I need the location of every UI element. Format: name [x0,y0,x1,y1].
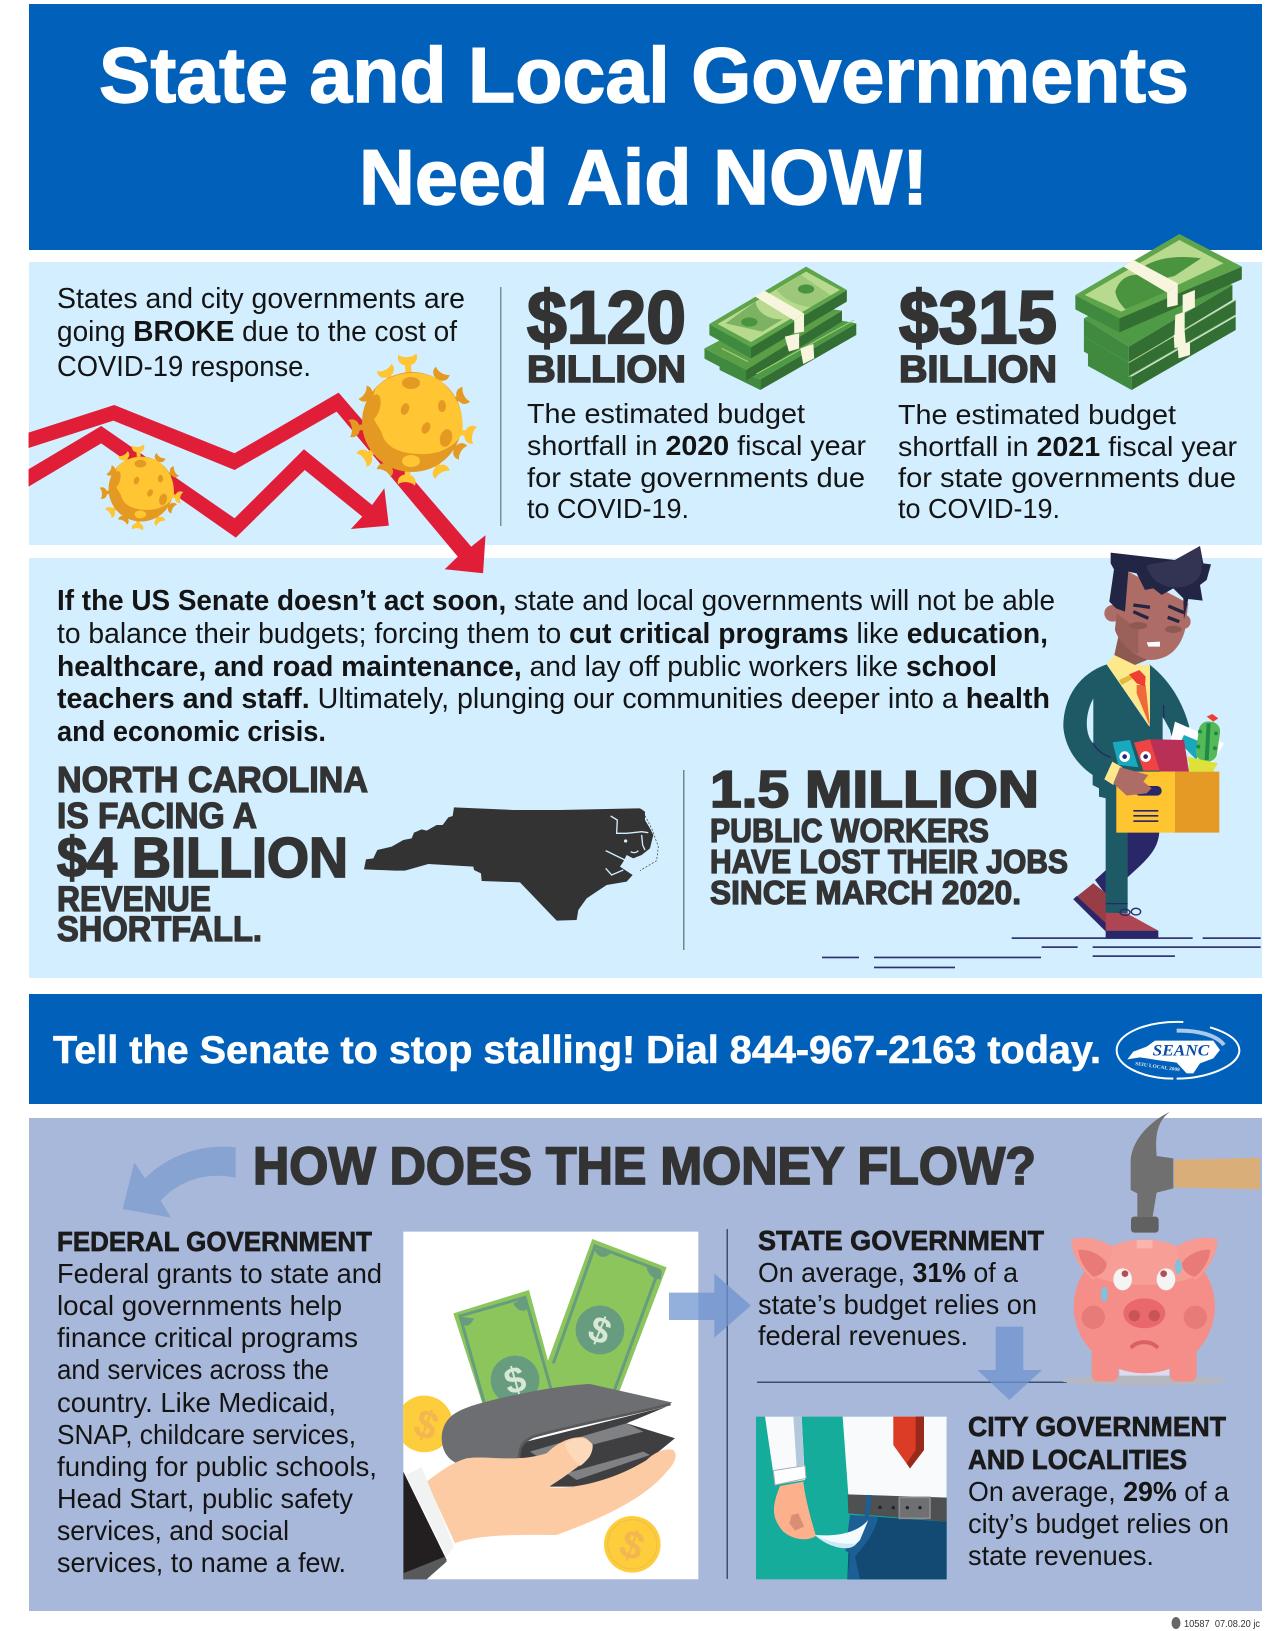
call to action banner [29,994,1262,1104]
arrow: to state [669,1273,751,1338]
senate paragraph: healthcare, and road maintenance, and lay off public workers like school [57,651,997,683]
$315 billion stat: shortfall in 2021 fiscal year [898,431,1237,462]
state government text: STATE GOVERNMENT [758,1225,1044,1256]
north carolina stat: NORTH CAROLINA [57,759,368,800]
icon: small virus [100,444,183,530]
$120 billion stat [527,276,866,524]
illustration: worker carrying box [822,546,1261,968]
illustration: wallet in hand: $ [583,1307,617,1353]
coin [604,1516,661,1573]
shirt and tie [1107,655,1150,727]
jacket [1063,664,1189,798]
illustration: wallet in hand [403,1232,698,1579]
illustration: wallet in hand: $ [500,1358,530,1403]
title banner [29,4,1262,250]
title: State and Local Governments [99,31,1189,119]
illustration: hammer over piggy bank [1061,1112,1260,1386]
senate paragraph: teachers and staff. Ultimately, plunging our communities deeper into a health [57,683,1050,715]
heading: HOW DOES THE MONEY FLOW? [253,1137,1036,1196]
logo: SEANC: SEANC [1153,1042,1210,1059]
logo: SEANC [1117,1022,1239,1079]
federal government text: Federal grants to state and [57,1258,382,1289]
state government text: federal revenues. [758,1320,968,1351]
$120 billion stat: The estimated budget [527,398,805,429]
city government text: city’s budget relies on [968,1508,1229,1539]
senate paragraph: If the US Senate doesn’t act soon, state and local governments will not be able [57,585,1055,617]
wallet [520,1407,675,1487]
federal government text: services, and social [57,1515,289,1546]
$315 billion stat: The estimated budget [898,399,1176,430]
$120 billion stat: $120 [527,276,686,359]
divider line [757,1382,1067,1383]
divider line [726,1229,728,1579]
icon: small money stack [704,267,856,390]
title [99,31,1189,221]
state government text: state’s budget relies on [758,1289,1037,1320]
federal government text [57,1226,382,1578]
phone call text: Tell the Senate to stop stalling! Dial 844-967-2163 today. [53,1029,1101,1072]
coin [403,1396,453,1452]
intro text [57,283,465,383]
divider line [500,287,502,526]
chart: falling red arrows [29,393,486,573]
arrow: to city [977,1327,1042,1400]
federal government text: and services across the [57,1354,329,1385]
ground lines [822,937,1261,968]
$315 billion stat: to COVID-19. [898,493,1060,524]
public workers stat: SINCE MARCH 2020. [710,874,1021,911]
footer job code: 10587 07.08.20 jc [1184,1618,1260,1630]
panel: senate action [29,558,1262,978]
back bill [530,1239,667,1410]
box contents [1170,722,1224,763]
federal government text: Head Start, public safety [57,1483,353,1514]
city government text: AND LOCALITIES [968,1444,1187,1475]
arrow: curved to federal [123,1147,236,1218]
senate paragraph: to balance their budgets; forcing them to cut critical programs like education, [57,618,1048,650]
$120 billion stat: shortfall in 2020 fiscal year [527,430,866,461]
illustration: empty pocket [756,1417,947,1579]
intro text: States and city governments are [57,283,465,315]
panel: budget shortfall [29,262,1262,545]
north carolina stat: REVENUE [57,880,211,919]
senate paragraph: and economic crisis. [57,716,326,748]
city government text [968,1411,1229,1571]
illustration: wallet in hand: $ [614,1521,650,1570]
state government text: On average, 31% of a [758,1257,1018,1288]
$315 billion stat: $315 [899,276,1057,359]
federal government text: services, to name a few. [57,1547,346,1578]
north carolina stat: SHORTFALL. [57,910,262,949]
$120 billion stat: to COVID-19. [527,493,689,524]
hand [1104,762,1122,785]
icon: large money stack [1075,234,1242,390]
$120 billion stat: BILLION [527,349,686,391]
map: north carolina [364,807,658,921]
logo: SEANC: SEIU LOCAL 2008 [1135,1062,1181,1073]
icon: large virus [348,353,477,486]
federal government text: country. Like Medicaid, [57,1387,336,1418]
intro text: COVID-19 response. [57,351,311,383]
$315 billion stat: for state governments due [898,462,1236,493]
box [1116,772,1175,833]
city government text: state revenues. [968,1540,1154,1571]
public workers stat: PUBLIC WORKERS [710,812,989,849]
$120 billion stat: for state governments due [527,462,865,493]
federal government text: finance critical programs [57,1322,358,1353]
divider line [683,770,684,950]
federal government text: local governments help [57,1290,342,1321]
$315 billion stat [898,276,1237,524]
senate paragraph [57,585,1055,748]
$315 billion stat: BILLION [899,349,1057,391]
federal government text: funding for public schools, [57,1451,377,1482]
illustration: wallet in hand: $ [408,1401,444,1450]
public workers stat [710,761,1068,911]
panel: how does the money flow [29,1112,1262,1611]
north carolina stat: $4 BILLION [57,826,348,890]
city government text: On average, 29% of a [968,1476,1229,1507]
hand [427,1437,676,1543]
front bill [453,1290,563,1417]
federal government text: FEDERAL GOVERNMENT [57,1226,372,1257]
north carolina stat [57,759,368,949]
public workers stat: HAVE LOST THEIR JOBS [710,843,1068,880]
north carolina stat: IS FACING A [57,795,257,836]
public workers stat: 1.5 MILLION [710,761,1039,819]
neck and head [1114,637,1148,665]
federal government text: SNAP, childcare services, [57,1419,356,1450]
state government text [758,1225,1044,1351]
title: Need Aid NOW! [359,133,928,221]
city government text: CITY GOVERNMENT [968,1411,1226,1442]
intro text: going BROKE due to the cost of [57,316,458,348]
